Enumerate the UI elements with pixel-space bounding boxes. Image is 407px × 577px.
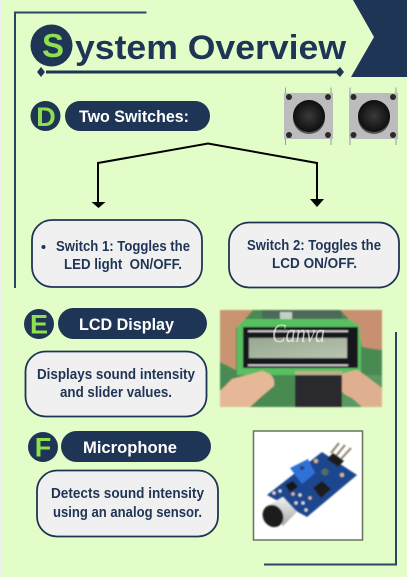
corner chevron [351, 0, 407, 77]
heading: LCD display [24, 308, 207, 340]
panel: switch 1 [32, 220, 202, 287]
arrow: to switch 1 and switch 2 [92, 144, 324, 208]
heading: LCD display: LCD Display [79, 315, 175, 334]
panel: switch 2: Switch 2: Toggles the [247, 238, 381, 254]
panel: switch 2: LCD ON/OFF. [272, 256, 357, 272]
heading: microphone: F [35, 432, 51, 462]
panel: microphone description: using an analog sensor. [53, 505, 202, 521]
icon: push button 2 [349, 88, 398, 145]
panel: microphone description: Detects sound intensity [51, 486, 204, 502]
panel: switch 1: LED light ON/OFF. [64, 257, 182, 273]
photo: LCD display held in hands [220, 310, 382, 407]
panel: LCD description [26, 352, 206, 416]
panel: microphone description [37, 470, 218, 536]
panel: LCD description: and slider values. [60, 385, 172, 401]
right corner frame [264, 332, 396, 564]
panel: switch 1: Switch 1: Toggles the [56, 239, 190, 255]
heading: two switches: D [36, 102, 56, 132]
panel: switch 2 [229, 222, 399, 288]
heading: two switches: Two Switches: [79, 107, 189, 126]
photo: LCD display held in hands: Canva [272, 319, 325, 348]
icon: push button 1 [284, 88, 333, 145]
title: ystem Overview [75, 29, 347, 67]
left corner frame [15, 12, 146, 288]
title: S [42, 27, 64, 64]
title underline [37, 67, 344, 77]
heading: LCD display: E [30, 310, 48, 340]
heading: microphone [28, 431, 211, 462]
heading: microphone: Microphone [83, 438, 177, 457]
panel: LCD description: Displays sound intensity [37, 367, 195, 383]
photo: microphone sensor module [254, 431, 362, 540]
heading: two switches [30, 101, 210, 132]
